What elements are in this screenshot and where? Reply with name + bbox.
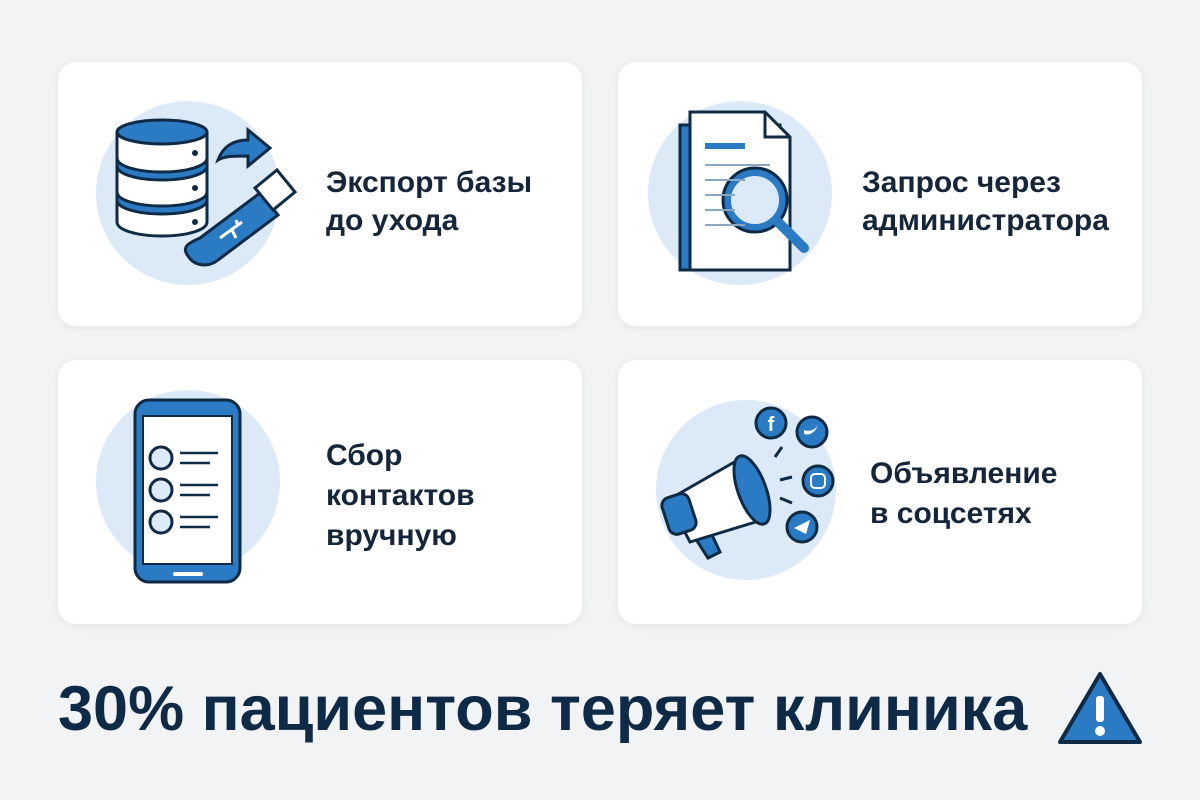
text bbox=[870, 457, 1058, 530]
icon: warning bbox=[1058, 672, 1142, 744]
text bbox=[326, 439, 475, 552]
panel: manual contacts bbox=[58, 360, 582, 624]
text: Запрос через bbox=[862, 166, 1061, 199]
text: администратора bbox=[862, 204, 1109, 237]
text: Экспорт базы bbox=[326, 166, 532, 199]
text: Объявление bbox=[870, 457, 1058, 490]
text bbox=[326, 166, 532, 237]
icon: database and usb bbox=[96, 101, 298, 285]
title: 30% пациентов теряет клиника bbox=[58, 674, 1027, 744]
icon: megaphone with social icons bbox=[656, 400, 836, 580]
text: в соцсетях bbox=[870, 497, 1032, 530]
icon: phone with contacts bbox=[96, 390, 280, 584]
panel: export bbox=[58, 62, 582, 326]
panel: social announcement bbox=[618, 360, 1142, 624]
text: до ухода bbox=[326, 204, 458, 237]
icon: megaphone with social icons: f bbox=[768, 414, 775, 436]
text bbox=[862, 166, 1110, 237]
text: вручную bbox=[326, 519, 457, 552]
text: Сбор bbox=[326, 439, 402, 472]
panel: admin request bbox=[618, 62, 1142, 326]
text: контактов bbox=[326, 479, 475, 512]
icon: document magnifier bbox=[648, 101, 832, 285]
